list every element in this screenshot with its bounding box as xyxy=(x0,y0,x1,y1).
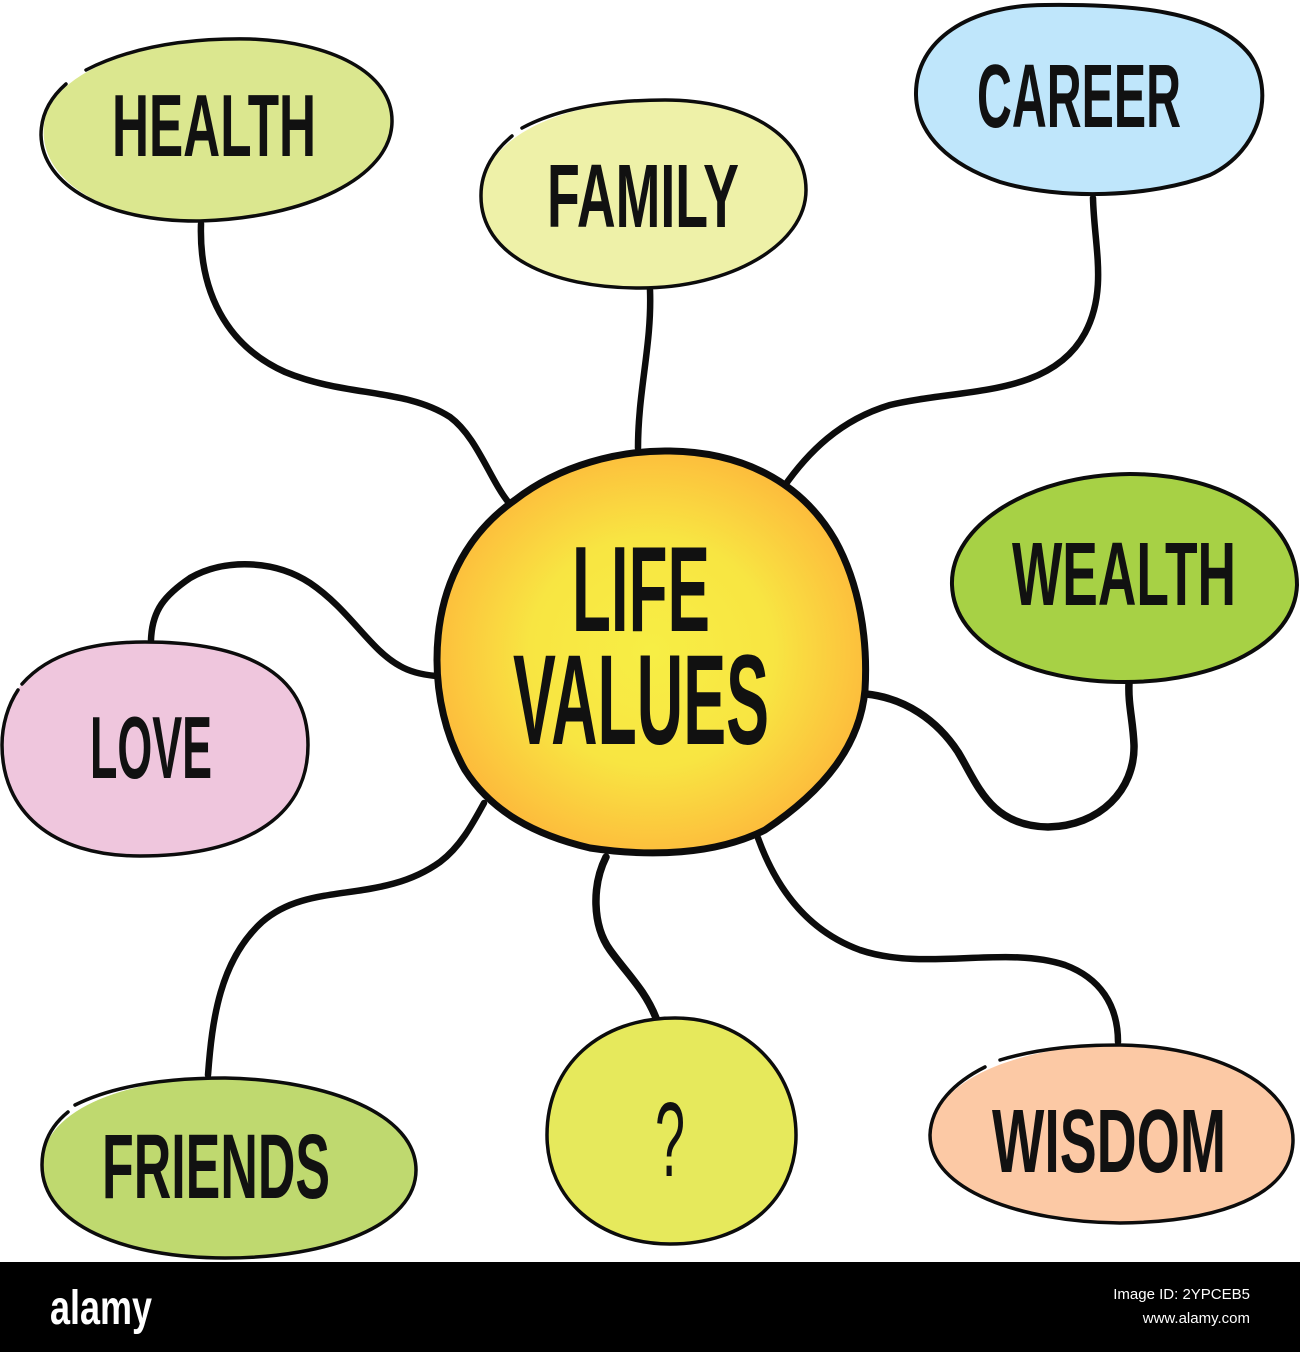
connector: career xyxy=(783,198,1098,488)
node: family: FAMILY xyxy=(547,147,739,247)
node: health: HEALTH xyxy=(112,76,316,175)
node: wealth xyxy=(952,474,1297,682)
footer logo: alamy xyxy=(50,1282,152,1335)
connector: wisdom xyxy=(758,838,1118,1042)
node: family xyxy=(481,100,806,288)
node: love: LOVE xyxy=(90,698,212,797)
node: health xyxy=(41,39,392,221)
central node: life values: VALUES xyxy=(513,629,769,772)
node: question xyxy=(547,1018,796,1244)
node: friends xyxy=(42,1078,416,1258)
connector: question xyxy=(596,857,656,1018)
footer bar xyxy=(0,1262,1300,1352)
node: friends: FRIENDS xyxy=(102,1116,330,1218)
node: wisdom xyxy=(930,1045,1293,1223)
central node: life values: LIFE xyxy=(572,521,710,657)
connector: wealth xyxy=(866,683,1134,827)
node: love xyxy=(2,642,308,856)
node: question: ? xyxy=(655,1081,685,1199)
connector: health xyxy=(201,224,509,503)
connector: friends xyxy=(208,803,484,1075)
node: career xyxy=(916,5,1262,194)
central node: life values xyxy=(437,451,866,853)
connector: family xyxy=(638,290,650,448)
image id: Image ID: 2YPCEB5 xyxy=(1113,1286,1250,1303)
connector: love xyxy=(151,564,436,676)
website: www.alamy.com xyxy=(1142,1310,1250,1327)
